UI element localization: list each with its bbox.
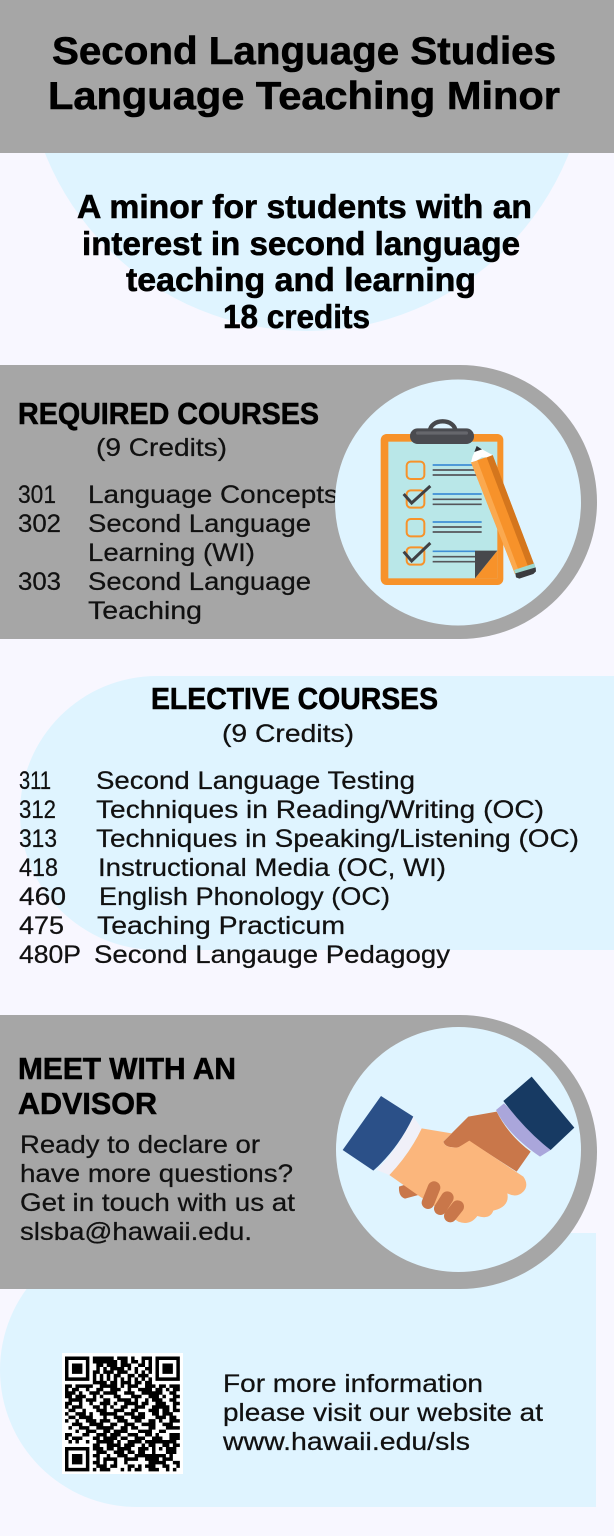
elective course list: Second Language Testing: [96, 767, 415, 795]
elective credits: (9 Credits): [222, 720, 354, 748]
elective course list: Instructional Media (OC, WI): [98, 854, 446, 882]
website text: [222, 1370, 543, 1456]
elective course list: English Phonology (OC): [99, 883, 390, 911]
heading: required courses: REQUIRED COURSES: [18, 396, 319, 431]
icon: clipboard and pencil: [381, 421, 536, 585]
elective course list: 313: [19, 825, 57, 853]
title banner: Language Teaching Minor: [48, 75, 560, 118]
required course list: [18, 481, 338, 625]
required course list: Teaching: [88, 597, 202, 625]
elective course list: Second Langauge Pedagogy: [94, 941, 451, 969]
title banner: [0, 0, 614, 153]
elective course list: Teaching Practicum: [97, 912, 345, 940]
required icon circle: [335, 380, 581, 626]
subtitle: [77, 188, 532, 335]
advisor text: Get in touch with us at: [20, 1189, 295, 1217]
advisor text: Ready to declare or: [20, 1131, 260, 1159]
elective course list: 418: [19, 854, 58, 882]
subtitle: teaching and learning: [126, 261, 476, 298]
required course list: Learning (WI): [88, 539, 255, 567]
required course list: Language Concepts: [88, 481, 338, 509]
elective course list: [19, 767, 579, 969]
subtitle: A minor for students with an: [77, 188, 532, 225]
advisor text: slsba@hawaii.edu.: [20, 1218, 252, 1246]
subtitle: 18 credits: [223, 298, 370, 335]
elective course list: 312: [19, 796, 56, 824]
elective course list: 480P: [19, 941, 81, 969]
subtitle: interest in second language: [82, 225, 520, 262]
website text: For more information: [223, 1370, 483, 1398]
elective course list: 311: [19, 767, 51, 795]
title banner: Second Language Studies: [52, 30, 556, 73]
required course list: 301: [18, 481, 56, 509]
elective course list: Techniques in Speaking/Listening (OC): [96, 825, 579, 853]
required course list: Second Language: [88, 510, 311, 538]
top background circle: [25, 0, 589, 331]
advisor text: have more questions?: [20, 1160, 293, 1188]
required course list: 303: [18, 568, 61, 596]
heading: elective courses: ELECTIVE COURSES: [151, 681, 438, 716]
elective course list: Techniques in Reading/Writing (OC): [96, 796, 544, 824]
website text: please visit our website at: [223, 1399, 543, 1427]
heading: meet with an advisor: ADVISOR: [18, 1086, 157, 1121]
website text: www.hawaii.edu/sls: [222, 1428, 470, 1456]
heading: meet with an advisor: MEET WITH AN: [18, 1051, 236, 1086]
advisor text: [20, 1131, 295, 1246]
heading: meet with an advisor: [18, 1051, 236, 1121]
panel: elective courses: [19, 676, 614, 969]
required credits: (9 Credits): [96, 434, 227, 462]
panel: website background: [0, 1233, 596, 1507]
elective course list: 475: [19, 912, 64, 940]
icon: handshake: [343, 1077, 574, 1223]
elective course list: 460: [19, 883, 66, 911]
panel: meet with an advisor: [0, 1015, 597, 1289]
required course list: Second Language: [88, 568, 311, 596]
panel: required courses: [0, 365, 597, 639]
required course list: 302: [18, 510, 61, 538]
QR code: [62, 1353, 183, 1474]
advisor icon circle: [336, 1027, 581, 1272]
